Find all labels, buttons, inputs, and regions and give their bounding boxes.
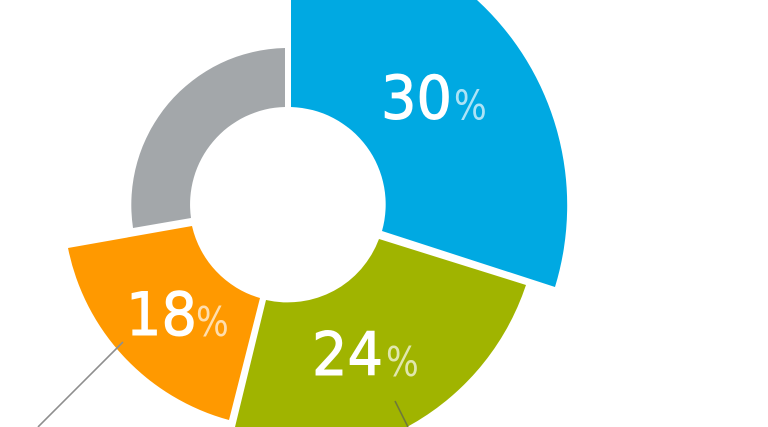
segment: gray xyxy=(131,48,285,228)
label: 24% xyxy=(312,319,419,389)
segment: orange 18% xyxy=(68,226,260,420)
label: 24%: 24 xyxy=(312,319,383,389)
label: 30%: % xyxy=(454,82,487,129)
label: 18%: % xyxy=(196,298,229,346)
label: 18%: 18 xyxy=(126,279,197,349)
segment: blue 30% xyxy=(291,0,567,287)
label: 24%: % xyxy=(386,338,419,386)
segment: olive 24% xyxy=(235,239,526,427)
label: 30%: 30 xyxy=(381,63,452,133)
leader line: orange xyxy=(38,342,123,427)
label: 18% xyxy=(126,279,229,349)
leader line: olive xyxy=(395,401,408,427)
label: 30% xyxy=(381,63,487,133)
